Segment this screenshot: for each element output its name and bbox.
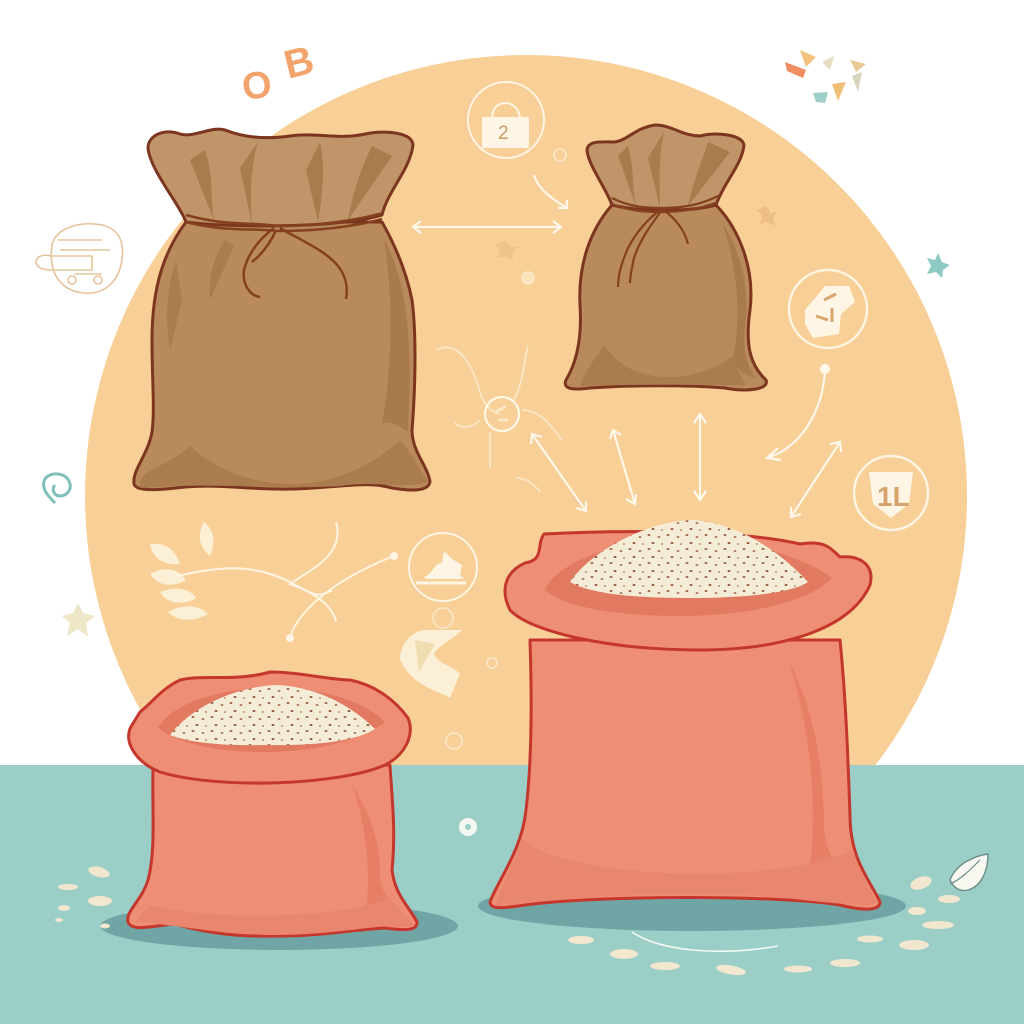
icon: padlock badge 2: 2	[498, 123, 509, 144]
sack body	[565, 205, 766, 390]
teal floor	[0, 765, 1024, 1024]
spilled rice right	[568, 874, 960, 977]
red sack right	[490, 520, 880, 909]
icon: hill badge	[409, 533, 477, 601]
brown sack small	[565, 125, 766, 390]
icon: pale leaf shape	[400, 630, 462, 698]
floor shadow right	[478, 881, 906, 931]
gathered top	[587, 125, 744, 210]
red sack left	[128, 672, 417, 936]
leaf branch doodle	[150, 522, 398, 642]
spilled rice left	[55, 864, 112, 928]
brown sack large	[134, 129, 430, 490]
arrows: pointing to large sack	[531, 365, 841, 517]
icon: stars	[62, 206, 950, 637]
floor shadow left	[100, 902, 458, 950]
icon: cart line art left	[36, 224, 122, 293]
letters O B: B	[280, 38, 318, 88]
sack body	[490, 640, 880, 909]
floor curved line	[632, 932, 778, 951]
icon: white leaf	[950, 854, 988, 891]
small dots and rings	[433, 149, 566, 749]
tied rope	[612, 196, 718, 212]
arrow: curved small top	[534, 175, 567, 208]
icon: 1L badge	[854, 456, 928, 530]
icon: padlock badge 2	[468, 82, 544, 158]
icon: spiral pin	[44, 474, 70, 503]
icon: round badge right	[789, 270, 867, 348]
rolled rim	[129, 672, 410, 783]
letters O B	[239, 38, 318, 109]
arrow: between brown bags	[413, 221, 561, 233]
sack body	[128, 765, 417, 936]
sack body	[134, 222, 430, 490]
rice	[570, 520, 808, 598]
rice	[170, 685, 375, 745]
gathered top	[148, 129, 413, 226]
confetti top right	[785, 50, 866, 103]
letters O B: O	[239, 63, 274, 109]
tied rope	[186, 213, 383, 231]
sun circle backdrop	[85, 55, 967, 937]
icon: 1L badge: 1L	[877, 481, 910, 512]
small floor badge	[459, 818, 477, 836]
rolled rim	[505, 532, 871, 650]
network doodle centre	[436, 346, 562, 492]
